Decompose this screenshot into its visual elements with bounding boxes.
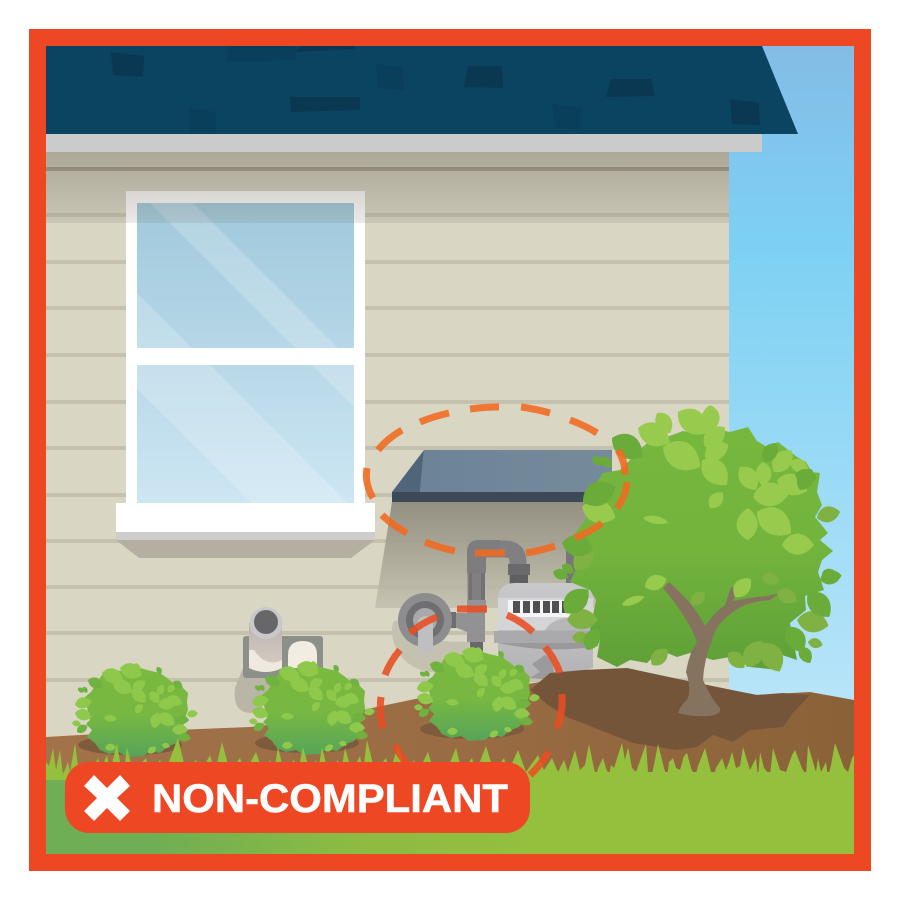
gas pipes [453,540,578,656]
fascia [46,134,762,152]
edge leaves [551,427,843,666]
light leaves [579,402,814,608]
shrub 3 [414,644,540,741]
roof [46,46,798,134]
meter dial [508,600,578,617]
awning shadow [375,502,600,608]
roof shadow band [46,152,729,223]
shrub 2 [249,658,375,755]
mulch bed [530,668,810,750]
callout: dashed highlight over awning [366,407,627,553]
badge label: NON-COMPLIANT [152,777,508,821]
mid leaves [567,504,842,677]
canopy [567,427,833,670]
tree [551,402,843,716]
regulator [392,593,470,672]
vent pipe [235,607,323,713]
awning over meter [392,450,612,502]
window [116,191,375,558]
grass [46,738,854,854]
soil ground [46,672,854,790]
non-compliant badge [65,762,530,833]
trunk and branches [663,582,780,716]
gas meter [494,583,598,680]
sky [46,46,854,766]
house wall siding [46,152,729,742]
icon: x mark [84,775,130,821]
shrub 1 [72,660,198,757]
callout: dashed highlight over regulator [380,609,562,775]
